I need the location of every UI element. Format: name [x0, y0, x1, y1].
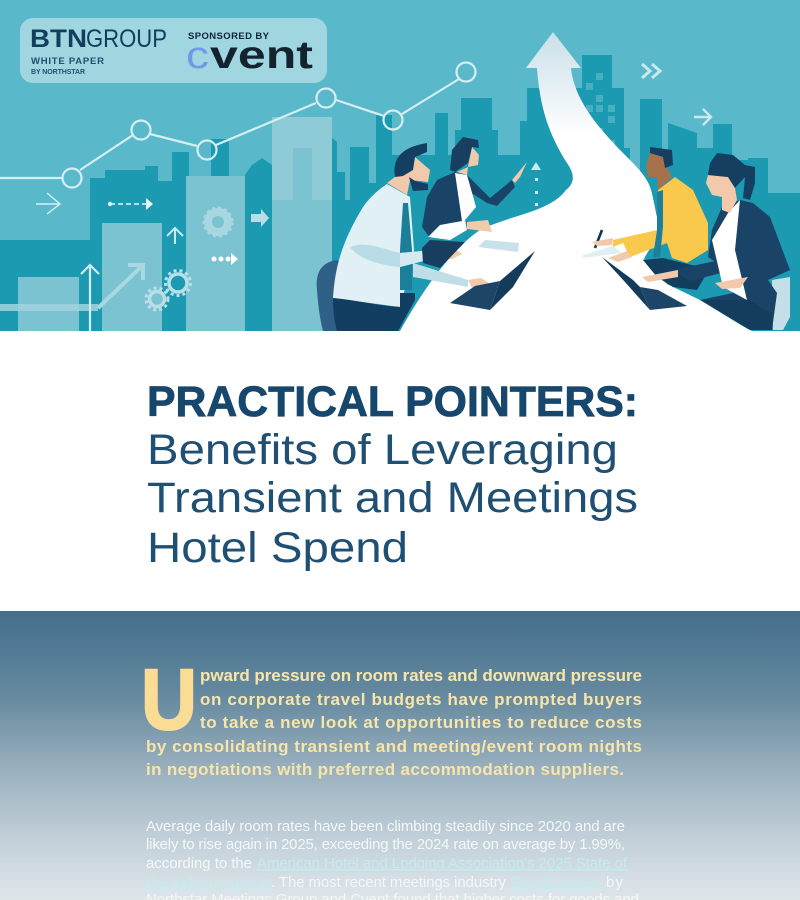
lead paragraph with drop cap: in negotiations with preferred accommodation suppliers. — [146, 760, 624, 779]
person: man in yellow — [592, 147, 708, 290]
growth line chart — [0, 62, 476, 188]
sponsor — [186, 31, 313, 77]
body paragraph: likely to rise again in 2025, exceeding the 2024 rate on average by 1.99%, — [146, 836, 625, 853]
logo panel — [20, 18, 327, 83]
body paragraph: PULSE survey — [511, 874, 604, 891]
sponsor: SPONSORED BY — [188, 31, 270, 42]
fading article panel — [0, 611, 800, 900]
lead paragraph with drop cap: to take a new look at opportunities to reduce costs — [200, 713, 642, 732]
rising arrow road — [400, 32, 752, 331]
BTN Group wordmark: GROUP — [86, 25, 167, 53]
small arrows and gears — [36, 64, 711, 331]
body paragraph: the industry report — [146, 874, 272, 891]
body paragraph: by — [606, 874, 624, 891]
BTN Group wordmark: BY NORTHSTAR — [31, 69, 85, 76]
title: Hotel Spend — [147, 524, 408, 572]
lead paragraph with drop cap: on corporate travel budgets have prompted buyers — [200, 690, 642, 709]
BTN Group wordmark: WHITE PAPER — [31, 56, 104, 67]
BTN Group wordmark: BTN — [30, 25, 87, 53]
documents and laptops — [450, 230, 687, 310]
sponsor: c — [186, 35, 209, 77]
lead paragraph with drop cap: pward pressure on room rates and downward pressure — [200, 666, 642, 685]
BTN Group wordmark — [30, 25, 167, 76]
hero illustration — [0, 0, 800, 331]
person: woman in navy — [422, 137, 527, 268]
sponsor: vent — [210, 34, 313, 77]
body paragraph: . The most recent meetings industry — [271, 874, 506, 891]
lead paragraph with drop cap: by consolidating transient and meeting/event room nights — [146, 737, 642, 756]
title: Transient and Meetings — [147, 474, 638, 522]
body paragraph: Average daily room rates have been climbing steadily since 2020 and are — [146, 818, 625, 835]
title: Benefits of Leveraging — [147, 426, 618, 474]
person: woman with ponytail — [642, 153, 790, 330]
drop cap U: U — [141, 652, 197, 748]
body paragraph — [146, 818, 639, 900]
city skyline — [0, 55, 800, 331]
title: PRACTICAL POINTERS: — [147, 378, 638, 426]
translucent towers — [0, 117, 332, 331]
body paragraph: American Hotel and Lodging Association's 2025 State of — [257, 855, 628, 872]
lead paragraph with drop cap — [141, 652, 642, 779]
body paragraph: according to the — [146, 855, 252, 872]
person: bearded man — [317, 143, 492, 331]
title — [147, 378, 638, 572]
